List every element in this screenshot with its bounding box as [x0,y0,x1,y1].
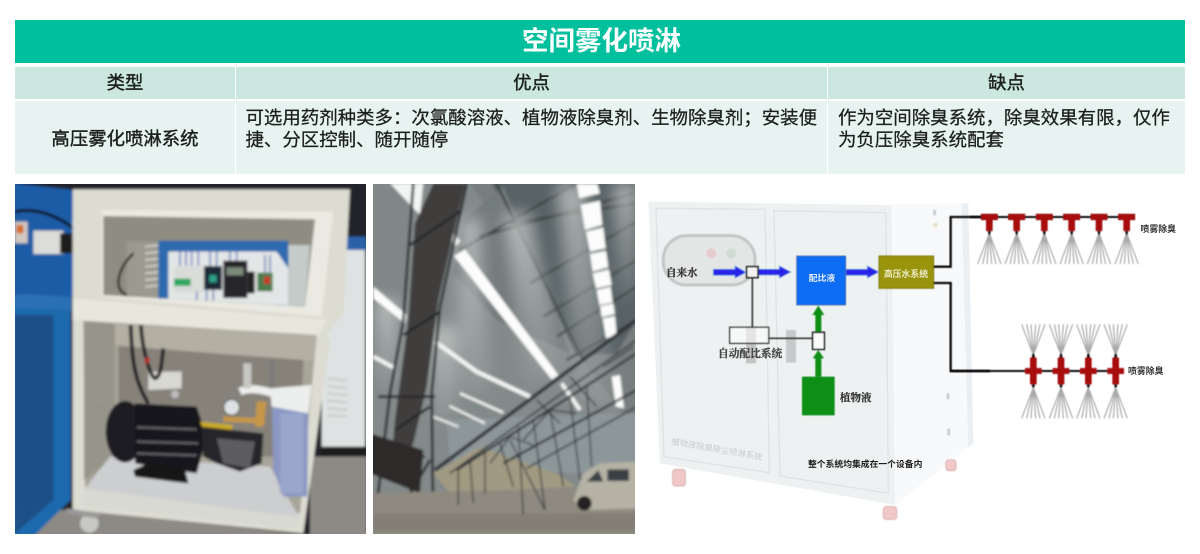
title [15,20,1185,63]
table cell: disadvantages text: 作为空间除臭系统，除臭效果有限，仅作 [838,107,1170,128]
diagram labels: 配比液 [809,272,835,283]
table header: advantages: 优点 [513,72,550,93]
diagram labels [666,265,928,469]
table cell: system type: 高压雾化喷淋系统 [51,128,199,148]
diagram labels: 植物液除臭降尘喷淋系统 [671,436,764,462]
flow chart [713,217,990,415]
table header: disadvantages [828,67,1185,99]
table cell: system type [15,101,235,174]
box: mixing liquid [797,256,846,305]
spray nozzles: top branch and bottom branch [950,212,1176,419]
photo: equipment cabinet with pump and control panel [15,184,366,534]
diagram labels: 自来水 [666,265,698,280]
table header: type: 类型 [107,72,143,93]
table header: disadvantages: 缺点 [988,72,1025,93]
label: top spray deodorization: 喷雾除臭 [1140,223,1176,234]
table cell: advantages text: 捷、分区控制、随开随停 [246,129,448,150]
table cell: advantages text: 可选用药剂种类多：次氯酸溶液、植物液除臭剂、生物除臭剂；安装便 [246,107,817,128]
control lines [752,277,813,338]
top row sprayers [978,214,1138,264]
top pipe [970,214,1135,220]
arrows: water flow [713,266,879,278]
box: high-pressure water system [879,256,934,288]
bottom row sprayers [1022,324,1127,418]
photo: factory hall with high-pressure mist spraying [373,184,635,534]
valve: water [747,267,758,278]
valve: plant liquid [813,332,824,349]
tank: plant liquid [802,377,835,415]
table cell: advantages text [236,101,827,174]
table header: advantages [236,67,827,99]
arrows: plant liquid flow [812,306,824,377]
table cell: disadvantages text [828,101,1185,174]
table cell: disadvantages text: 为负压除臭系统配套 [838,129,1004,150]
schematic diagram: integrated spraying system [648,202,990,520]
title: 空间雾化喷淋 [522,26,681,56]
diagram labels: 植物液 [840,390,872,405]
diagram labels: 自动配比系统 [718,346,783,361]
label: bottom spray deodorization: 喷雾除臭 [1128,365,1164,376]
diagram labels: 整个系统均集成在一个设备内 [808,458,923,469]
table header: type [15,67,235,99]
box: automatic proportioning system [730,327,769,343]
diagram labels: 高压水系统 [884,268,928,279]
bottom pipe [950,368,1123,374]
cabinet background [648,202,973,519]
output pipes [934,217,990,371]
